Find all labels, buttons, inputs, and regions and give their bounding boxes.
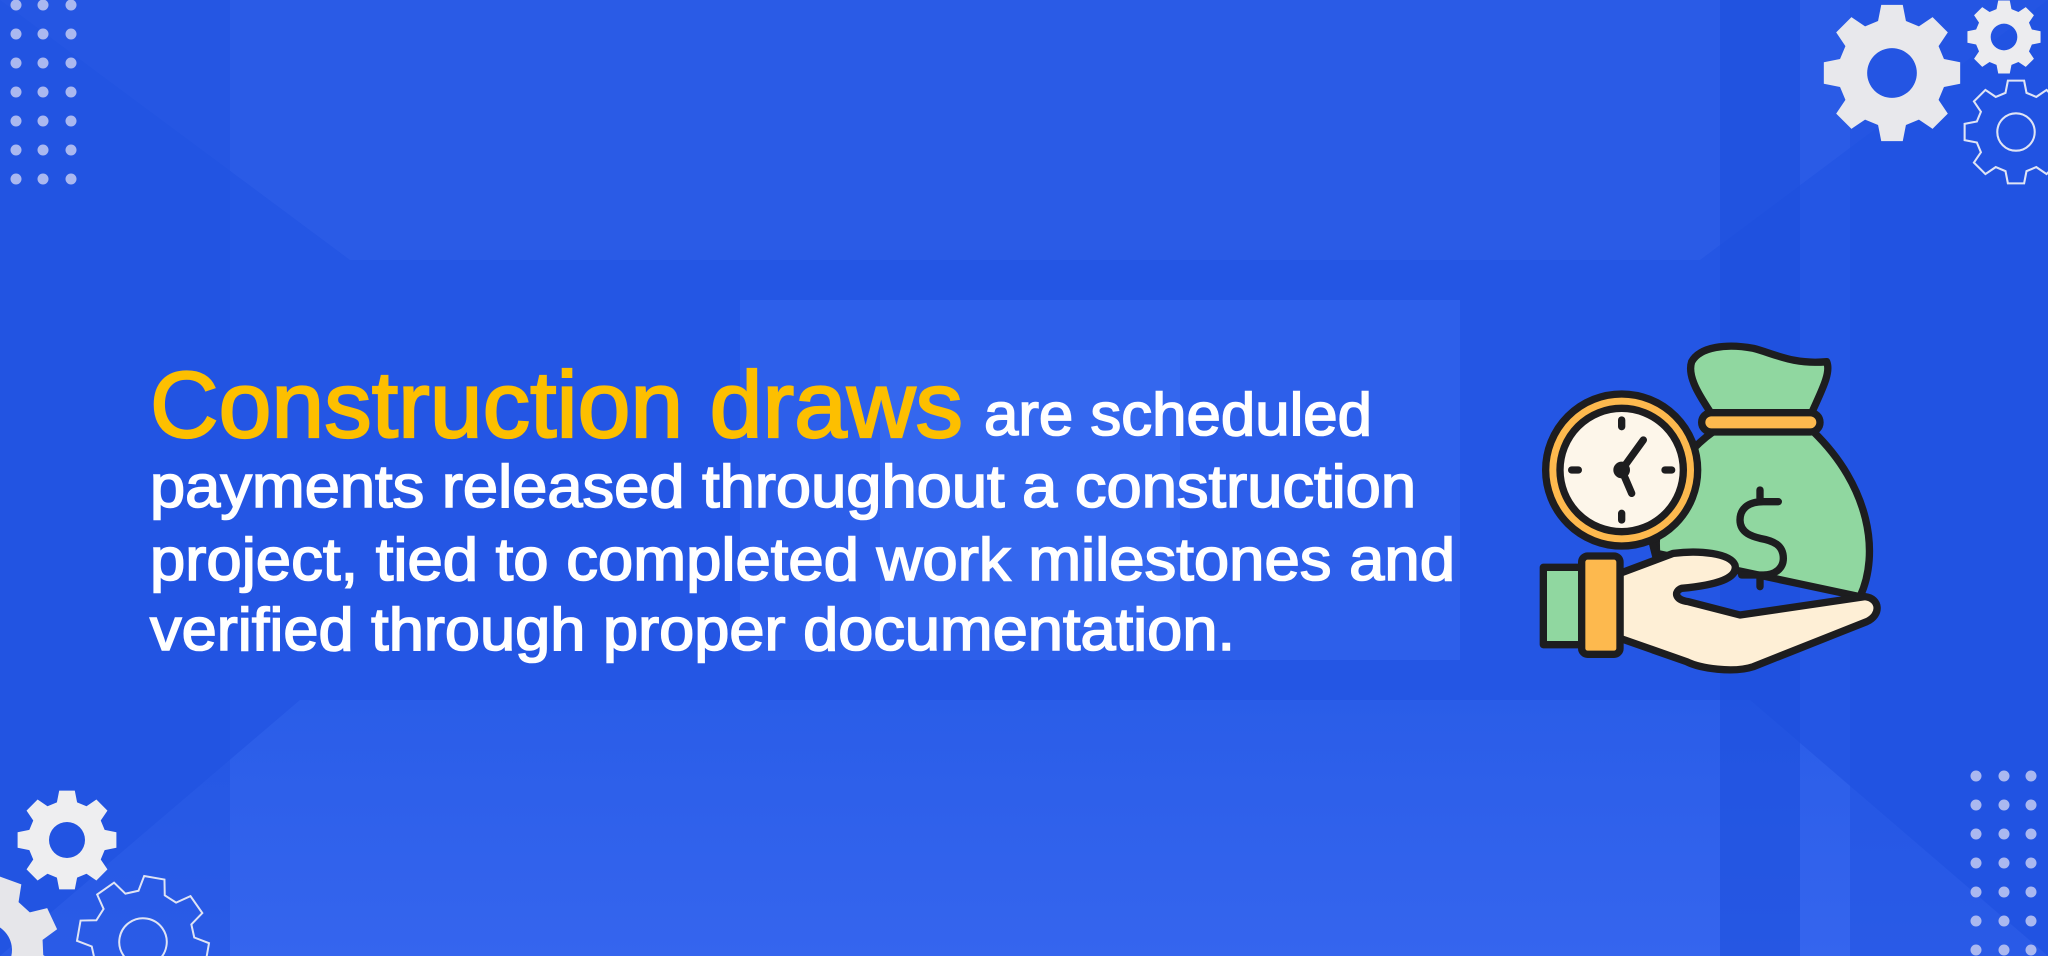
palm (1620, 552, 1877, 670)
bag top (1691, 346, 1828, 417)
dollar sign (1740, 490, 1783, 587)
body text: project, tied to completed work milestones and (150, 526, 1455, 593)
body text: verified through proper documentation. (150, 596, 1235, 663)
heading: Construction draws: Construction draws (150, 352, 963, 457)
bag body (1656, 432, 1869, 597)
cuff (1543, 567, 1583, 645)
decoration: dot grid bottom-right (1970, 770, 2036, 956)
body text (150, 381, 1455, 663)
body text: payments released throughout a construction (150, 453, 1416, 520)
icon: hand holding money bag with clock (1540, 342, 1881, 674)
clock stem (1652, 540, 1657, 560)
body text: are scheduled (984, 381, 1372, 448)
icon: gears top-right (1824, 0, 2048, 184)
text block: definition (149, 352, 1455, 664)
icon: gears bottom-left (0, 790, 210, 956)
clock (1546, 394, 1698, 546)
bag band (1702, 413, 1820, 432)
decoration: dot grid top-left (10, 0, 76, 184)
